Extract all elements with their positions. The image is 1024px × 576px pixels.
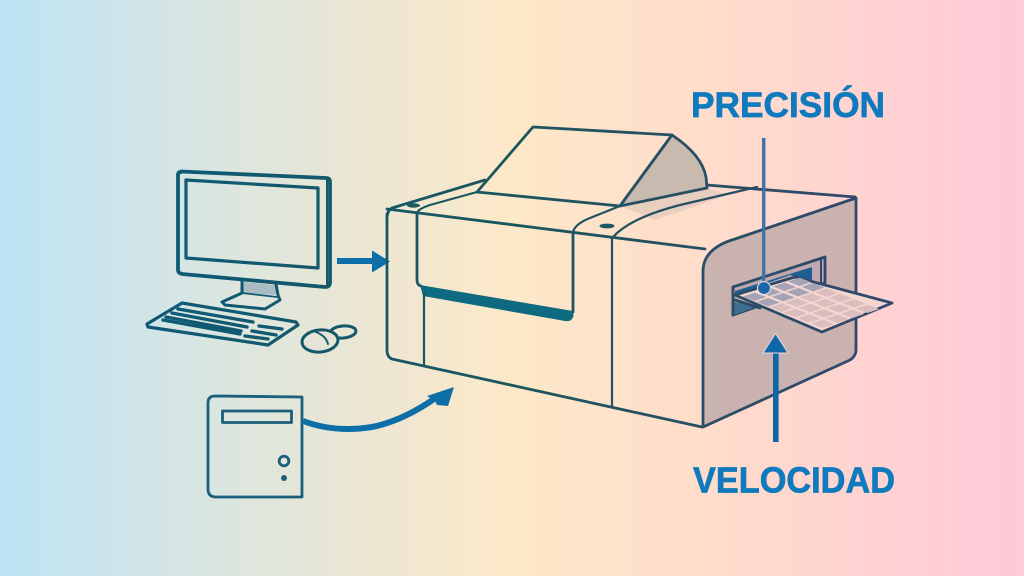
button: right — [600, 224, 614, 228]
heading: precision: PRECISIÓN — [691, 85, 885, 125]
output slot — [733, 257, 825, 315]
monitor stand — [222, 281, 280, 309]
heading: speed: VELOCIDAD — [693, 460, 895, 500]
icon: mouse — [301, 325, 356, 354]
precision pointer line — [758, 138, 770, 294]
paper tray — [477, 127, 707, 206]
arrow: computer to printer — [337, 250, 390, 272]
printer — [387, 127, 892, 427]
computer workstation — [147, 172, 356, 354]
label cells — [743, 278, 879, 328]
faint shade behind paper tray — [620, 188, 728, 220]
arrow: speed — [763, 334, 788, 442]
button: left — [407, 203, 420, 208]
printed label sheet — [735, 277, 892, 332]
printer body outline — [387, 180, 856, 427]
icon: tower server — [208, 396, 302, 497]
output lip — [420, 285, 574, 321]
front cover — [417, 187, 757, 321]
icon: monitor — [178, 172, 330, 309]
arrow: tower to printer — [303, 387, 454, 429]
panel seams — [424, 237, 612, 407]
icon: keyboard — [147, 303, 298, 345]
printer side face — [703, 198, 856, 427]
